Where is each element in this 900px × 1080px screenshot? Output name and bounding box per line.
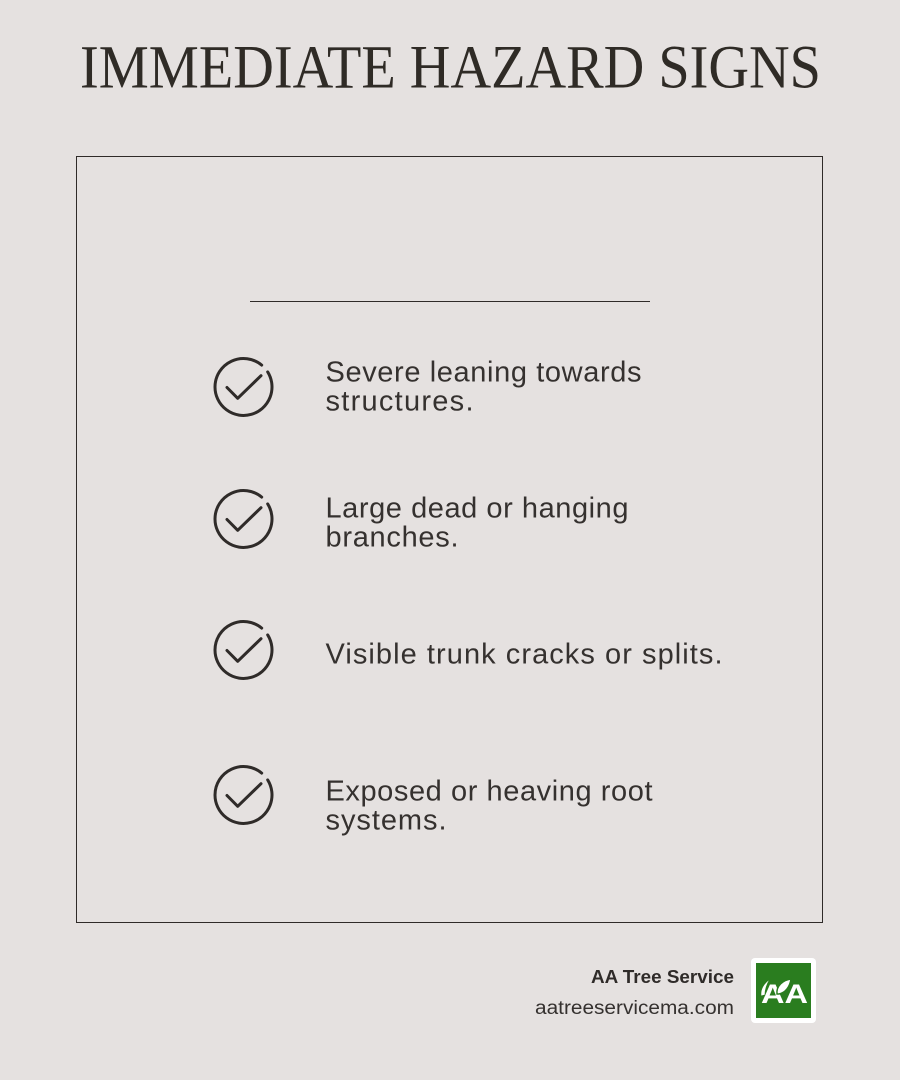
logo [751, 958, 816, 1023]
website: aatreeservicema.com [535, 998, 734, 1019]
item: dead branches [215, 491, 628, 554]
title: IMMEDIATE HAZARD SIGNS [80, 34, 821, 102]
item: exposed roots: systems. [326, 804, 446, 836]
text: exposed roots: Exposed or heaving root [326, 776, 652, 808]
item: dead branches: branches. [326, 522, 458, 554]
item: trunk cracks [215, 622, 722, 678]
panel: hazard signs [76, 156, 822, 922]
icon: check circle [215, 767, 272, 823]
text: severe leaning: Severe leaning towards [326, 356, 642, 388]
text: dead branches: Large dead or hanging [326, 492, 628, 524]
logo: AA [761, 979, 808, 1009]
item: severe leaning [215, 356, 642, 418]
item: exposed roots [215, 767, 652, 836]
icon: check circle [215, 622, 272, 678]
icon: check circle [215, 359, 272, 415]
text: trunk cracks: Visible trunk cracks or splits. [326, 638, 722, 670]
icon: check circle [215, 491, 272, 547]
item: severe leaning: structures. [326, 386, 474, 418]
brand name: AA Tree Service [591, 966, 734, 987]
